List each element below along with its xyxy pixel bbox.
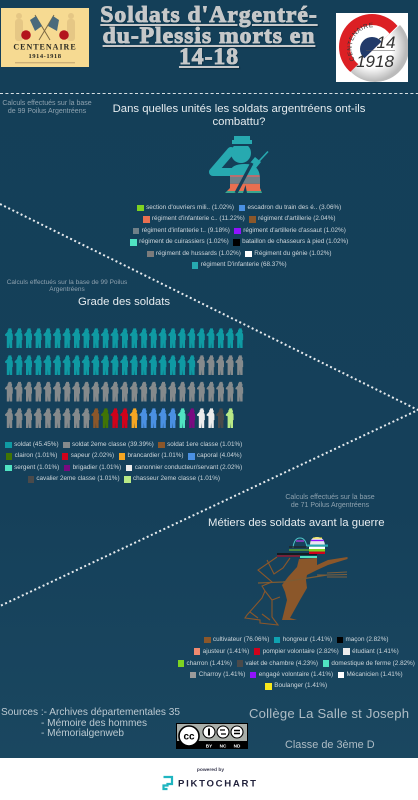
- pictogram chart: soldier ranks: [5, 328, 244, 428]
- logo: centenaire cocarde: 14: [377, 33, 395, 52]
- heading: ranks: Grade des soldats: [78, 296, 170, 308]
- title: [100, 2, 319, 70]
- heading: units: [113, 102, 365, 128]
- legend: trades: Mécanicien (1.41%): [347, 671, 403, 678]
- legend: units: régiment d'infanterie t.. (9.18%): [142, 227, 230, 234]
- note: calculation base, ranks: [7, 278, 127, 293]
- legend: ranks: sergent (1.01%): [14, 464, 59, 471]
- legend: ranks: canonnier conducteur/servant (2.02%): [135, 464, 242, 471]
- note: calculation base, trades: [285, 494, 375, 509]
- piktochart logo: PIKTOCHART: [178, 778, 258, 790]
- icon: creative commons BY-NC-ND badge: cc: [183, 732, 195, 742]
- icon: creative commons BY-NC-ND badge: ND: [234, 744, 241, 748]
- sources text: Sources :- Archives départementales 35: [1, 707, 180, 718]
- legend: units: régiment D'infanterie (68.37%): [201, 261, 287, 268]
- legend: units: escadron du train des é.. (3.06%): [247, 204, 341, 211]
- legend: ranks: caporal (4.04%): [197, 452, 242, 459]
- piktochart logo: [162, 776, 258, 790]
- icon: creative commons BY-NC-ND badge: NC: [220, 744, 227, 748]
- legend: trades: cultivateur (76.06%): [213, 636, 269, 643]
- logo: centenaire cocarde: 1918: [356, 52, 394, 71]
- legend: trades: ajusteur (1.41%): [203, 648, 249, 655]
- legend: ranks: brigadier (1.01%): [73, 464, 121, 471]
- note: calculation base, units: de 99 Poilus Argentréens: [8, 108, 86, 115]
- legend: ranks: soldat 2eme classe (39.39%): [72, 441, 154, 448]
- title: du-Plessis morts en: [103, 23, 315, 49]
- legend: trades: domestique de ferme (2.82%): [331, 660, 415, 667]
- logo: centenaire cocarde: CENTENAIRE: [347, 22, 373, 62]
- note: calculation base, ranks: Calculs effectués sur la base de 99 Poilus: [7, 278, 127, 286]
- legend: units: Régiment du génie (1.02%): [254, 250, 331, 257]
- note: calculation base, units: Calculs effectués sur la base: [2, 100, 92, 107]
- heading: units: combattu?: [212, 116, 265, 128]
- legend: trades: Boulanger (1.41%): [274, 682, 327, 689]
- icon: creative commons BY-NC-ND badge: BY: [206, 744, 212, 748]
- icon: peasant soldier with pitchfork: [244, 537, 348, 626]
- legend: trades: maçon (2.82%): [345, 636, 388, 643]
- powered by label: powered by: [197, 768, 224, 773]
- heading: units: Dans quelles unités les soldats argentréens ont-ils: [113, 102, 365, 114]
- legend: units: régiment d'infanterie c.. (11.22%): [152, 215, 245, 222]
- sources text: [1, 707, 180, 739]
- legend: units: régiment d'artillerie (2.04%): [258, 215, 335, 222]
- legend: units: régiment de cuirassiers (1.02%): [139, 238, 229, 245]
- legend: ranks: soldat 1ere classe (1.01%): [167, 441, 242, 448]
- legend: units: bataillon de chasseurs à pied (1.02%): [242, 238, 348, 245]
- class name: Classe de 3ème D: [285, 739, 375, 751]
- legend: ranks: chasseur 2eme classe (1.01%): [133, 475, 220, 482]
- legend: ranks: sapeur (2.02%): [71, 452, 114, 459]
- legend: trades: pompier volontaire (2.82%): [263, 648, 339, 655]
- note: calculation base, units: [2, 100, 92, 115]
- legend: units: régiment d'artillerie d'assaut (1.02%): [243, 227, 346, 234]
- icon: creative commons BY-NC-ND badge: [176, 723, 248, 749]
- logo: centenaire 1914-1918 flags: 1914-1918: [28, 53, 62, 60]
- legend: units: [130, 204, 348, 269]
- legend: ranks: soldat (45.45%): [14, 441, 59, 448]
- legend: trades: engagé volontaire (1.41%): [259, 671, 333, 678]
- legend: trades: Charroy (1.41%): [199, 671, 245, 678]
- legend: ranks: [5, 441, 242, 483]
- legend: trades: étudiant (1.41%): [352, 648, 399, 655]
- logo: centenaire 1914-1918 flags: CENTENAIRE: [13, 42, 77, 52]
- legend: trades: [178, 636, 415, 690]
- logo: centenaire 1914-1918 flags: [1, 8, 89, 67]
- legend: ranks: clairon (1.01%): [15, 452, 57, 459]
- legend: units: section d'ouvriers mili.. (1.02%): [146, 204, 234, 211]
- legend: ranks: cavalier 2eme classe (1.01%): [36, 475, 120, 482]
- heading: trades: Métiers des soldats avant la guerre: [208, 517, 385, 529]
- note: calculation base, trades: de 71 Poilus Argentréens: [291, 502, 369, 509]
- title: Soldats d'Argentré-: [100, 2, 318, 28]
- note: calculation base, trades: Calculs effectués sur la base: [285, 494, 375, 501]
- sources text: - Mémorialgenweb: [41, 728, 124, 739]
- school name: Collège La Salle st Joseph: [249, 706, 409, 721]
- note: calculation base, ranks: Argentréens: [49, 286, 85, 293]
- legend: trades: valet de chambre (4.23%): [245, 660, 318, 667]
- legend: trades: charron (1.41%): [186, 660, 232, 667]
- logo: centenaire cocarde: [336, 13, 408, 82]
- legend: units: régiment de hussards (1.02%): [156, 250, 241, 257]
- sources text: - Mémoire des hommes: [41, 718, 147, 729]
- legend: ranks: brancardier (1.01%): [127, 452, 184, 459]
- icon: saluting soldier with rifle: [209, 136, 268, 193]
- legend: trades: hongreur (1.41%): [283, 636, 332, 643]
- title: 14-18: [179, 44, 239, 70]
